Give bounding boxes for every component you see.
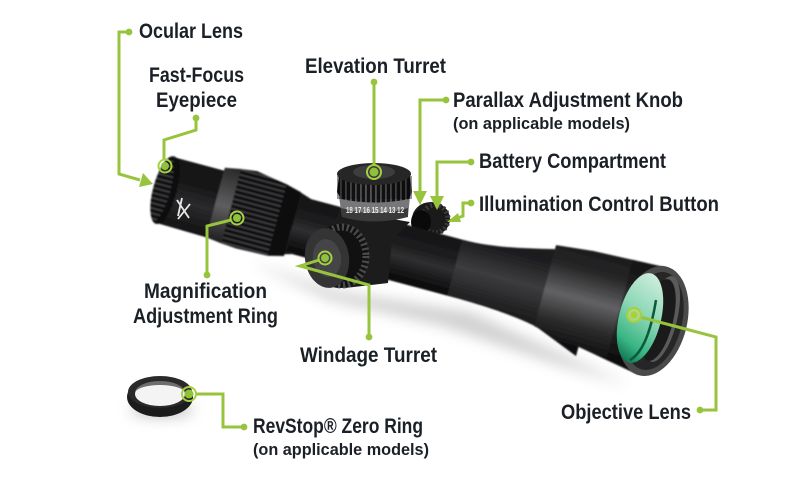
- callout line: revstop zero ring: [182, 387, 247, 430]
- label: fast-focus eyepiece: Fast-Focus: [149, 64, 244, 87]
- main tube: [278, 194, 482, 301]
- label: objective lens: Objective Lens: [561, 401, 691, 424]
- callout line: fast-focus eyepiece: [158, 115, 199, 172]
- eyepiece tube highlight: [286, 198, 338, 261]
- label: revstop zero ring: [253, 415, 429, 459]
- eyepiece body: [155, 149, 321, 265]
- elevation turret: [337, 163, 412, 222]
- label: parallax adjustment knob: [453, 89, 683, 133]
- label: revstop zero ring: RevStop® Zero Ring: [253, 415, 423, 438]
- fast-focus ring: [144, 153, 186, 227]
- callout line: objective lens: [627, 308, 716, 413]
- label: illumination control button: Illumination Control Button: [479, 193, 719, 216]
- label: ocular lens: Ocular Lens: [139, 20, 243, 43]
- scope shadow: [250, 262, 630, 385]
- callout line: illumination button: [447, 200, 474, 222]
- callout line: battery compartment: [430, 159, 474, 210]
- elevation turret: 18 17 16 15 14 13 12: [346, 206, 404, 215]
- label: revstop zero ring: (on applicable models): [253, 440, 429, 459]
- label: fast-focus eyepiece: [149, 64, 244, 112]
- label: magnification adjustment ring: Magnification: [144, 280, 267, 303]
- callout line: windage turret: [300, 252, 372, 340]
- callout line: ocular lens: [119, 29, 153, 187]
- label: magnification adjustment ring: [133, 280, 278, 328]
- label: parallax adjustment knob: (on applicable models): [453, 114, 630, 133]
- bell tapered section: [441, 217, 603, 356]
- label: parallax adjustment knob: Parallax Adjustment Knob: [453, 89, 683, 112]
- parallax knob: [411, 202, 450, 236]
- objective housing: [529, 238, 667, 375]
- label: magnification adjustment ring: Adjustment Ring: [133, 305, 278, 328]
- label: fast-focus eyepiece: Eyepiece: [156, 89, 237, 112]
- label: elevation turret: Elevation Turret: [305, 55, 446, 78]
- riflescope: [139, 134, 700, 385]
- brand logo: [177, 198, 190, 219]
- label: windage turret: Windage Turret: [300, 344, 437, 367]
- lighter band: [206, 165, 241, 243]
- callout line: magnification ring: [204, 212, 244, 278]
- zero ring: [127, 376, 194, 417]
- saddle: [325, 210, 410, 288]
- windage turret: [301, 224, 368, 291]
- callout line: elevation turret: [367, 79, 381, 179]
- callout line: parallax knob: [413, 97, 449, 205]
- objective lens: [606, 258, 700, 384]
- magnification ring: [221, 167, 303, 261]
- label: battery compartment: Battery Compartment: [479, 150, 666, 173]
